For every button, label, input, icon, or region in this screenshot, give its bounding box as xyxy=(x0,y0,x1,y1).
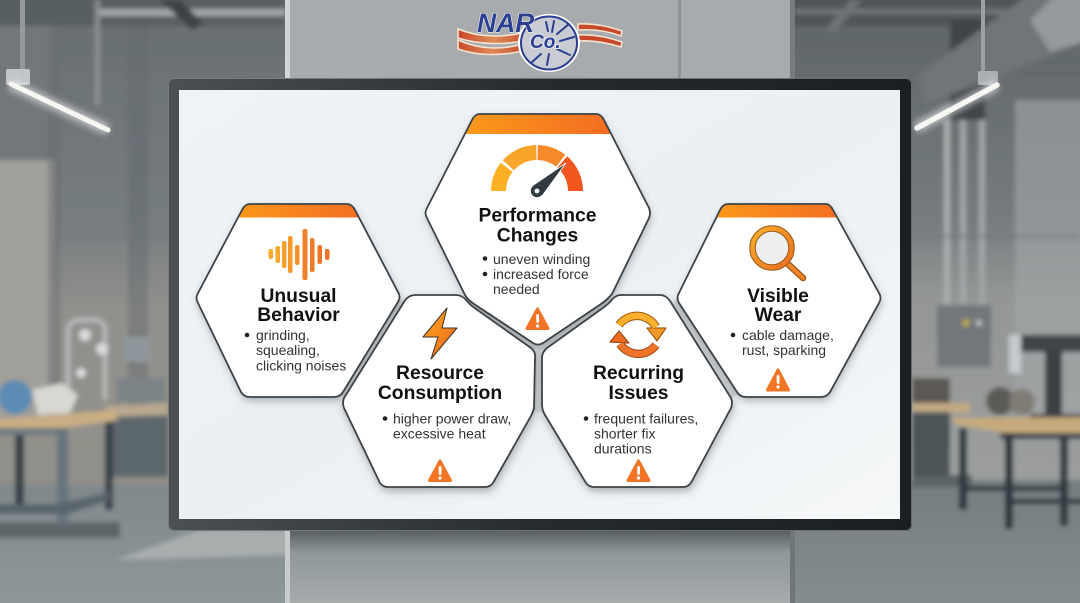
bullet text: needed xyxy=(493,281,540,297)
motor xyxy=(0,380,32,414)
electric panel xyxy=(937,305,991,367)
grinder machine xyxy=(1020,335,1080,352)
icon: warning xyxy=(768,370,788,390)
duct xyxy=(918,0,1080,105)
ceiling light left xyxy=(6,0,108,130)
heading: Unusual xyxy=(260,286,337,307)
bullet text xyxy=(383,410,511,442)
hexagon xyxy=(196,204,400,397)
panel: performance changes xyxy=(426,114,650,344)
bullet text: higher power draw, xyxy=(393,410,511,426)
bullet text xyxy=(483,251,590,297)
heading: Consumption xyxy=(378,383,502,404)
vertical pipes xyxy=(944,120,950,310)
heading: Resource xyxy=(396,363,484,384)
icon: warning xyxy=(527,309,548,328)
logo text: NAR xyxy=(477,8,534,38)
back bench left xyxy=(112,415,168,477)
orange band xyxy=(239,204,358,218)
floor left xyxy=(0,485,290,603)
bullet text: frequent failures, xyxy=(594,410,698,426)
orange band xyxy=(466,114,610,134)
bullet text xyxy=(731,327,834,358)
icon: sound wave xyxy=(268,229,330,280)
icon: warning xyxy=(628,461,649,480)
icon: warning xyxy=(430,461,450,480)
heading: Issues xyxy=(608,383,669,404)
left wall xyxy=(0,0,300,603)
bullet text: rust, sparking xyxy=(742,342,826,358)
bullet text xyxy=(245,327,346,374)
heading: Changes xyxy=(497,226,578,246)
bullet text: increased force xyxy=(493,266,589,282)
concrete pillar xyxy=(285,0,795,603)
logo wheel xyxy=(519,15,579,71)
orange band xyxy=(717,204,836,218)
heading: Visible xyxy=(747,286,809,307)
heading: Performance xyxy=(479,206,597,226)
panel: resource consumption xyxy=(343,295,535,487)
right wall xyxy=(790,0,1080,603)
bullet text: cable damage, xyxy=(742,327,834,343)
floor right xyxy=(790,480,1080,603)
logo text co: Co. xyxy=(530,32,561,53)
hexagon xyxy=(542,295,732,487)
electrical box xyxy=(125,337,151,362)
back bench right xyxy=(912,403,970,413)
pipe loop xyxy=(68,320,105,410)
bullet text: squealing, xyxy=(256,342,320,358)
monitor frame xyxy=(168,78,912,531)
heading: Recurring xyxy=(593,363,684,384)
front bench right xyxy=(952,417,1080,433)
heading: Behavior xyxy=(257,305,340,326)
hexagon xyxy=(678,204,880,397)
logo: NAR Co. xyxy=(458,8,622,71)
screen xyxy=(179,90,900,519)
bullet text: grinding, xyxy=(256,327,310,343)
hexagon xyxy=(426,114,650,344)
front bench left xyxy=(0,410,118,428)
bullet text: excessive heat xyxy=(393,426,486,442)
bullet text: shorter fix xyxy=(594,426,655,442)
gaps between hexagons xyxy=(343,298,735,412)
panel: visible wear xyxy=(678,204,880,397)
bullet text: clicking noises xyxy=(256,358,346,374)
bullet text: uneven winding xyxy=(493,251,590,267)
bullet text xyxy=(584,410,698,456)
icon: gauge xyxy=(491,145,583,197)
icon: lightning bolt xyxy=(423,308,457,359)
icon: recurring arrows xyxy=(610,316,666,354)
logo stripes xyxy=(458,24,622,54)
icon: magnifying glass xyxy=(752,228,803,278)
hexagon xyxy=(343,295,535,487)
heading: Wear xyxy=(755,305,802,326)
panel: unusual behavior xyxy=(196,204,400,397)
panel: recurring issues xyxy=(542,295,732,487)
bullet text: durations xyxy=(594,440,652,456)
ceiling light right xyxy=(916,0,998,128)
